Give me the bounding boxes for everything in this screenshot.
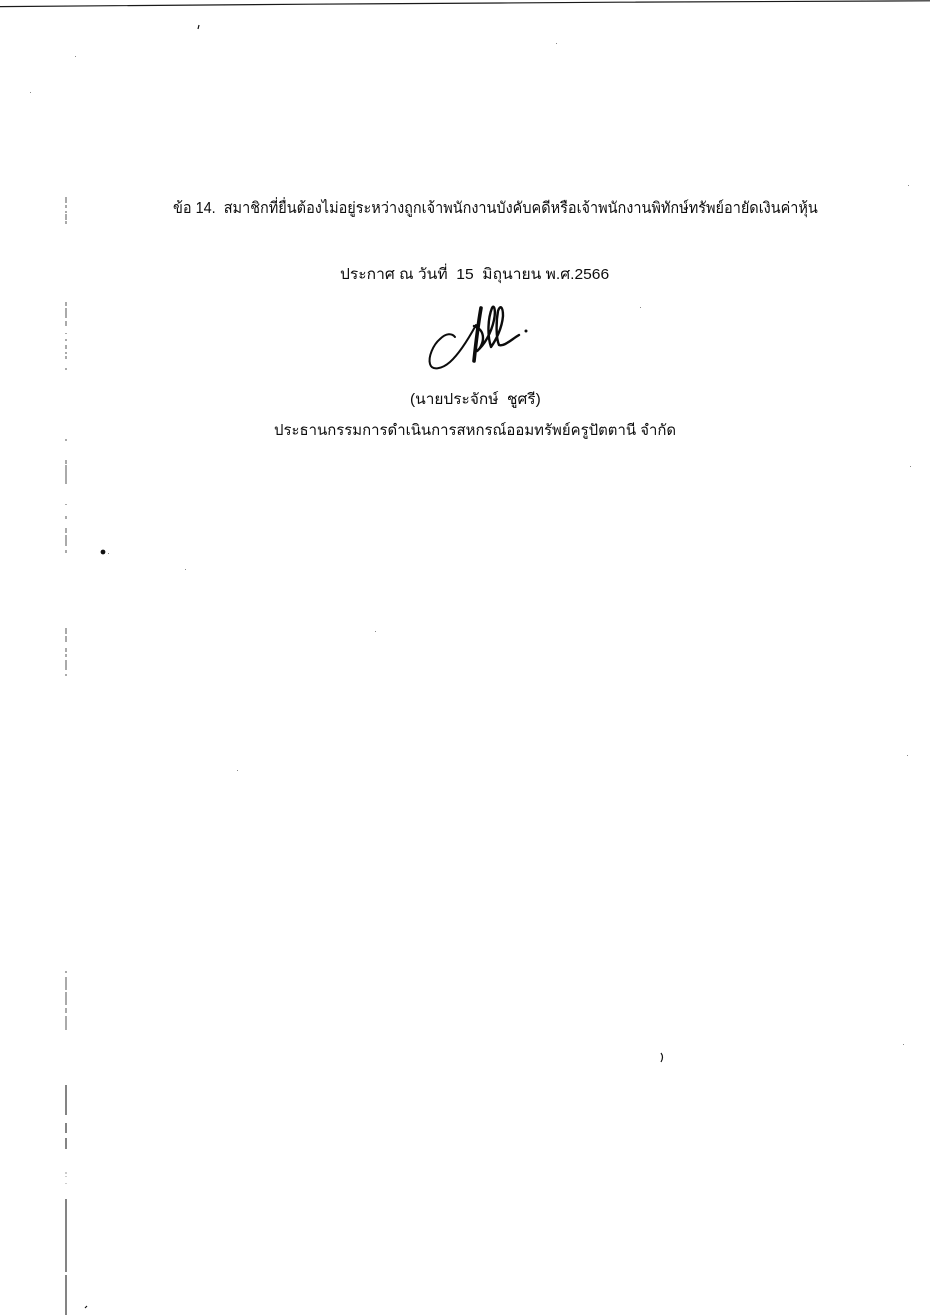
signatory title: ประธานกรรมการดำเนินการสหกรณ์ออมทรัพย์ครูปัตตานี จำกัด xyxy=(274,422,676,439)
icon: ink spot xyxy=(101,550,105,554)
announcement date: ประกาศ ณ วันที่ 15 มิถุนายน พ.ศ.2566 xyxy=(340,266,609,283)
clause 14 text: ข้อ 14. สมาชิกที่ยื่นต้องไม่อยู่ระหว่างถูกเจ้าพนักงานบังคับคดีหรือเจ้าพนักงานพิทักษ์ทรัพย์อายัดเงินค่าหุ้น xyxy=(173,200,818,217)
signatory name: (นายประจักษ์ ชูศรี) xyxy=(410,391,541,408)
